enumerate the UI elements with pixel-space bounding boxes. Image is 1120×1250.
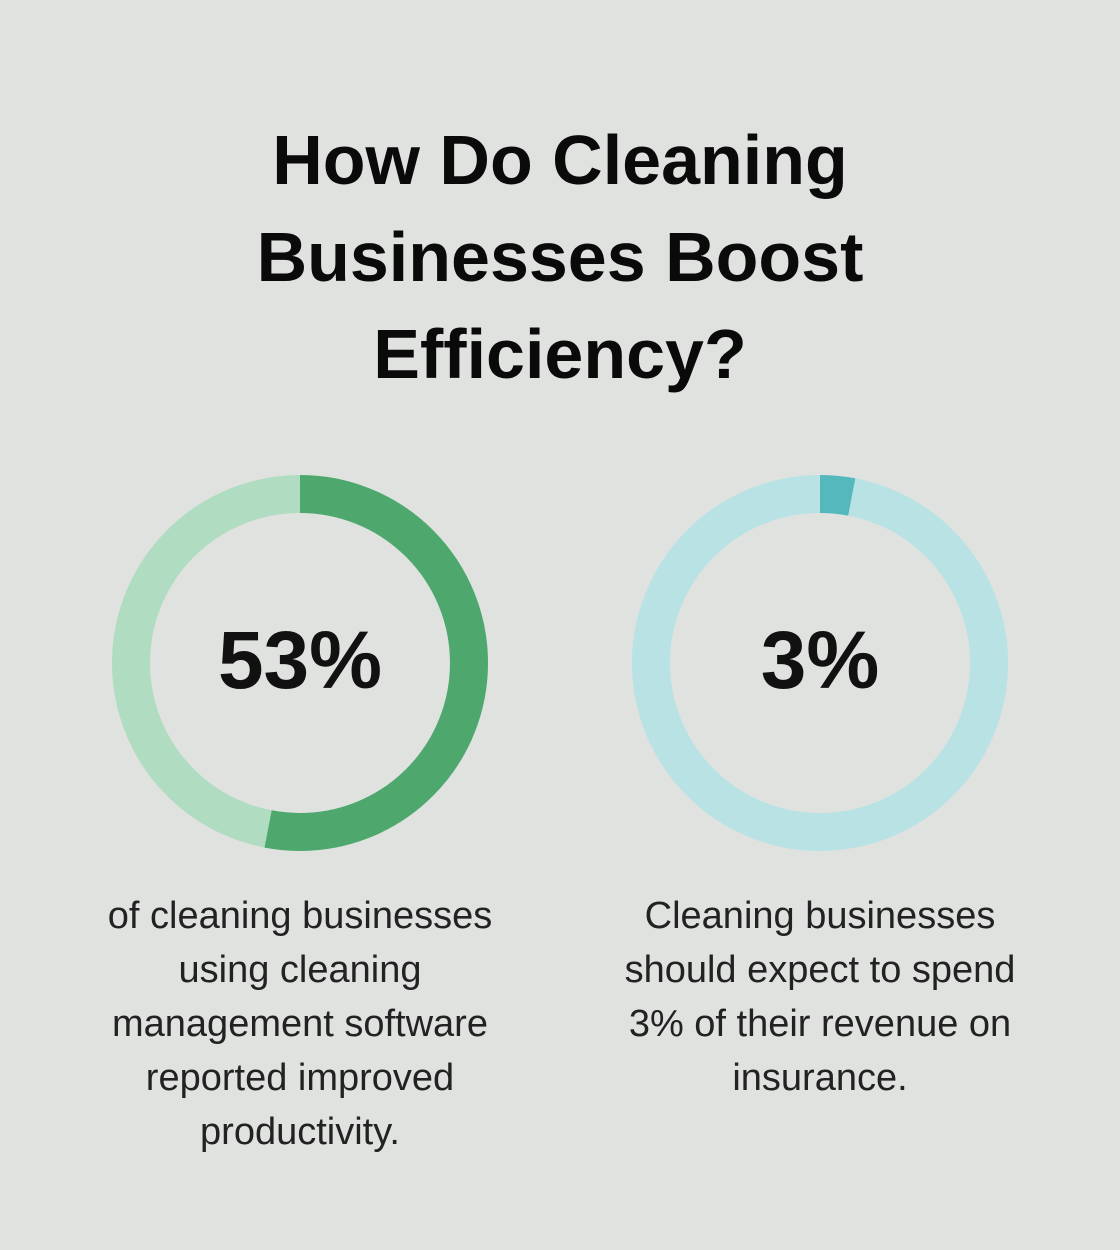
title: Businesses Boost bbox=[257, 218, 863, 296]
stat: 53%: 53% bbox=[218, 615, 382, 706]
title bbox=[257, 121, 863, 393]
caption: 3%: should expect to spend bbox=[625, 949, 1015, 991]
title: How Do Cleaning bbox=[272, 121, 848, 199]
stat: 3%: 3% bbox=[761, 615, 879, 706]
caption: 3%: insurance. bbox=[732, 1057, 908, 1099]
caption: 3% bbox=[625, 895, 1015, 1099]
caption: 53%: management software bbox=[112, 1003, 488, 1045]
caption: 53%: of cleaning businesses bbox=[108, 895, 492, 937]
caption: 53%: using cleaning bbox=[179, 949, 421, 991]
caption: 53%: productivity. bbox=[200, 1111, 400, 1153]
caption: 3%: 3% of their revenue on bbox=[629, 1003, 1011, 1045]
caption: 53% bbox=[108, 895, 492, 1153]
donut chart: 53% bbox=[112, 475, 488, 851]
caption: 53%: reported improved bbox=[146, 1057, 454, 1099]
title: Efficiency? bbox=[373, 315, 747, 393]
donut chart: 3% bbox=[632, 475, 1008, 851]
caption: 3%: Cleaning businesses bbox=[645, 895, 995, 937]
